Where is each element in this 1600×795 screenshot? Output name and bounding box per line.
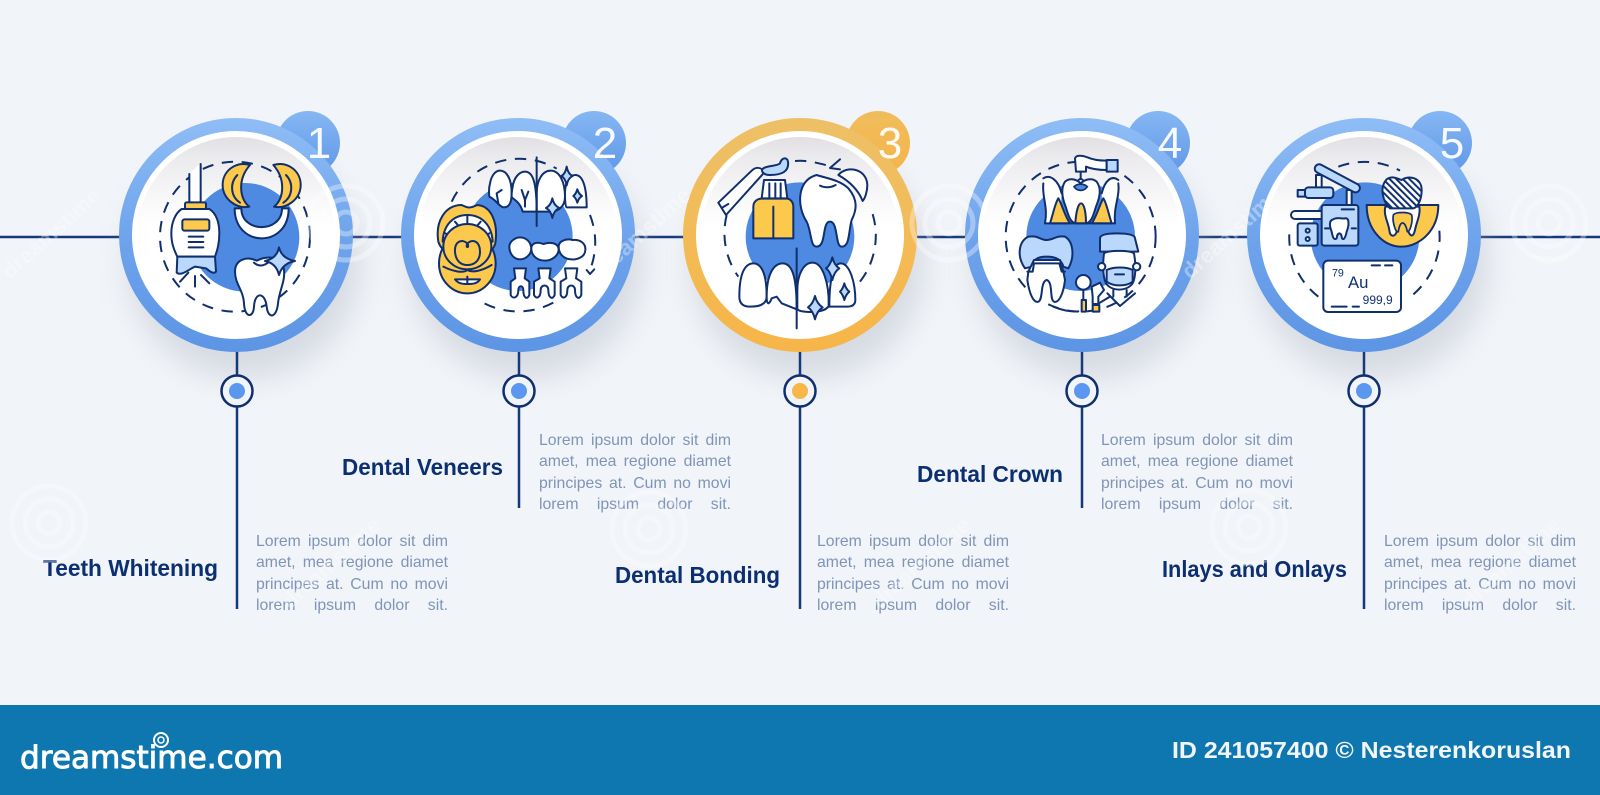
number 2: 2 [593, 119, 617, 168]
circle shadow [692, 146, 924, 378]
connector with dot [784, 350, 816, 609]
image id and credit: ID 241057400 © Nesterenkoruslan [1172, 737, 1571, 763]
description: amet, mea regione diamet [1101, 453, 1293, 470]
badge disc 5 [1408, 111, 1472, 175]
description: lorem ipsum dolor sit. [1384, 597, 1576, 614]
gold label: 79 [1332, 268, 1344, 280]
watermarks: dreamstime [1177, 182, 1285, 284]
description: amet, mea regione diamet [1384, 554, 1576, 571]
description: lorem ipsum dolor sit. [817, 597, 1009, 614]
description: principes at. Cum no movi [256, 576, 448, 593]
ring [683, 118, 917, 352]
description: lorem ipsum dolor sit. [256, 597, 448, 614]
panel: step 2 dental veneers [342, 111, 731, 518]
watermarks: dreamstime [1457, 512, 1565, 614]
gold label [1332, 268, 1393, 307]
description [256, 531, 448, 619]
connector with dot [504, 350, 534, 508]
panel: step 5 inlays and onlays [1162, 111, 1576, 619]
ring [119, 118, 353, 352]
heading: Teeth Whitening [43, 555, 218, 581]
description: amet, mea regione diamet [539, 453, 731, 470]
footer bar [0, 705, 1600, 795]
ring [1247, 118, 1481, 352]
description: Lorem ipsum dolor sit dim [256, 533, 448, 550]
description [539, 430, 731, 518]
description: principes at. Cum no movi [817, 576, 1009, 593]
watermarks: dreamstime [277, 512, 385, 614]
connector with dot [1348, 350, 1380, 609]
description: principes at. Cum no movi [1101, 475, 1293, 492]
heading: Dental Bonding [615, 562, 780, 588]
heading: Dental Veneers [342, 454, 503, 480]
description: amet, mea regione diamet [256, 554, 448, 571]
circle shadow [974, 146, 1206, 378]
panel: step 3 dental bonding [615, 111, 1009, 619]
circle shadow [410, 146, 642, 378]
circle shadow [128, 146, 360, 378]
description: Lorem ipsum dolor sit dim [817, 533, 1009, 550]
gold label: 999,9 [1363, 293, 1393, 307]
description: Lorem ipsum dolor sit dim [1101, 432, 1293, 449]
description [1101, 430, 1293, 518]
logo: dreamstime.com [20, 740, 283, 776]
description: lorem ipsum dolor sit. [1101, 496, 1293, 513]
heading: Dental Crown [917, 461, 1063, 487]
watermarks [0, 182, 1586, 614]
number 5: 5 [1440, 119, 1464, 168]
description: Lorem ipsum dolor sit dim [1384, 533, 1576, 550]
icon: dental unit, gold tooth and Au card [1289, 162, 1440, 312]
panel: step 4 dental crown [917, 111, 1293, 518]
panel: step 1 teeth whitening [43, 111, 448, 619]
description: lorem ipsum dolor sit. [539, 496, 731, 513]
connector with dot [222, 350, 252, 609]
number 3: 3 [878, 119, 902, 168]
icon: whitening lamp, tray and tooth [160, 162, 310, 315]
watermarks: dreamstime [867, 512, 975, 614]
description: principes at. Cum no movi [1384, 576, 1576, 593]
circle shadow [1256, 146, 1488, 378]
badge disc 4 [1126, 111, 1190, 175]
heading: Inlays and Onlays [1162, 556, 1347, 582]
icon: crown, drill and dentist [1006, 156, 1156, 312]
timeline axis [0, 236, 1600, 238]
icon: veneers, mouth and teeth [438, 157, 595, 311]
ring [965, 118, 1199, 352]
description: Lorem ipsum dolor sit dim [539, 432, 731, 449]
watermarks: dreamstime [587, 182, 695, 284]
description: amet, mea regione diamet [817, 554, 1009, 571]
ring [401, 118, 635, 352]
number 4: 4 [1158, 119, 1182, 168]
badge disc 3 [846, 111, 910, 175]
connector with dot [1066, 350, 1098, 508]
description: principes at. Cum no movi [539, 475, 731, 492]
gold label: Au [1348, 273, 1368, 292]
badge disc 2 [562, 111, 626, 175]
icon: bonding brush, tooth and front teeth [718, 158, 876, 328]
description [1384, 531, 1576, 619]
number 1: 1 [307, 119, 331, 168]
description [817, 531, 1009, 619]
badge disc 1 [276, 111, 340, 175]
